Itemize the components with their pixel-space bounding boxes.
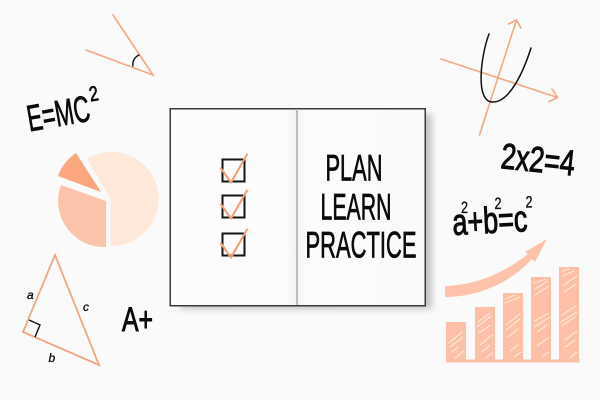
pie slice: large [87, 152, 159, 246]
right page [298, 110, 424, 305]
arrow: growth curve [445, 239, 547, 297]
bar 2 [475, 307, 495, 362]
bar 3 [503, 293, 523, 362]
book cover [170, 108, 426, 306]
book [170, 108, 432, 309]
triangle labels: c [83, 300, 89, 314]
word: learn: LEARN [320, 185, 392, 227]
formula: E=MC squared: E=MC [24, 88, 93, 139]
formula: E=MC squared [24, 82, 100, 139]
triangle labels: a [27, 288, 34, 302]
formula: 2x2=4: 2x2=4 [499, 135, 577, 184]
formula: E=MC squared: 2 [87, 82, 100, 106]
icon: angle diagram [86, 15, 153, 75]
checkbox 3 [221, 230, 247, 258]
formula: pythagorean theorem: 2 [494, 194, 502, 213]
grade: A plus: A+ [122, 301, 153, 339]
formula: pythagorean theorem: a+b=c [451, 198, 528, 243]
formula: pythagorean theorem: 2 [526, 192, 532, 212]
triangle labels: b [48, 351, 56, 365]
chart baseline [446, 360, 580, 362]
pie chart [58, 152, 159, 247]
icon: right triangle [23, 255, 99, 365]
book shadow [180, 114, 432, 309]
book text [306, 147, 416, 266]
pie slice: medium [58, 185, 106, 247]
left page [171, 110, 296, 305]
pie slice: small [58, 153, 101, 192]
bar 5 [559, 267, 579, 362]
word: practice: PRACTICE [306, 224, 416, 266]
spine [296, 109, 298, 305]
formula: pythagorean theorem: 2 [461, 198, 468, 217]
word: plan: PLAN [326, 147, 382, 189]
triangle labels [27, 288, 89, 365]
bar chart [446, 267, 580, 362]
bar scribbles [449, 269, 577, 358]
icon: parabola graph [441, 20, 558, 135]
checkbox 2 [221, 190, 247, 218]
checklist [221, 154, 247, 258]
checkbox 1 [221, 154, 247, 182]
bar 1 [446, 322, 466, 362]
bar 4 [531, 277, 551, 362]
